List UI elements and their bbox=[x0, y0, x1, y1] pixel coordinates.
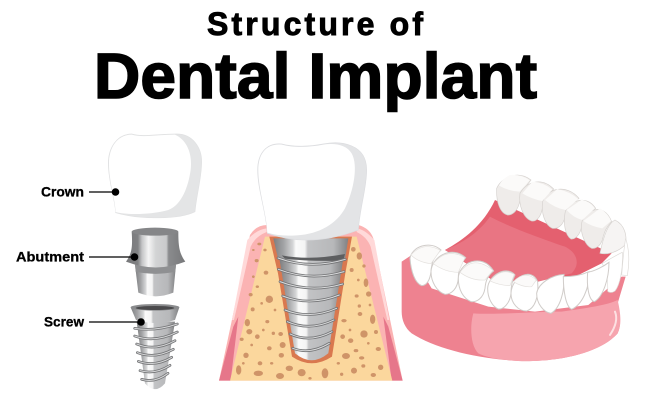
front row teeth bbox=[410, 245, 609, 313]
gum base bbox=[402, 255, 626, 361]
bone socket bbox=[269, 237, 352, 363]
gum bbox=[219, 225, 403, 381]
far side front teeth bbox=[602, 238, 629, 292]
label: Crown: Crown bbox=[41, 184, 84, 200]
label: Abutment bbox=[16, 248, 138, 264]
gum edge shine bbox=[610, 312, 616, 335]
panel: exploded implant parts bbox=[16, 134, 202, 389]
title line: Dental Implant: Dental Implant bbox=[94, 40, 537, 112]
front row occlusal tops bbox=[411, 247, 536, 287]
back row occlusal tops bbox=[499, 175, 611, 228]
bone spots bbox=[236, 243, 383, 380]
implant screw bbox=[273, 238, 348, 360]
bone bbox=[230, 237, 392, 381]
part: crown bbox=[108, 134, 202, 218]
title line: Structure of: Structure of bbox=[207, 6, 423, 42]
part: abutment bbox=[126, 228, 185, 296]
part: screw bbox=[131, 304, 179, 389]
label: Crown bbox=[41, 184, 119, 200]
jaw interior bbox=[445, 200, 612, 282]
panel: lower jaw with teeth bbox=[402, 175, 629, 361]
label: Screw: Screw bbox=[44, 314, 84, 330]
back row teeth bbox=[497, 175, 626, 254]
label: Abutment: Abutment bbox=[16, 248, 84, 264]
panel: implant in bone cross-section bbox=[219, 143, 403, 381]
implant crown bbox=[258, 143, 367, 240]
title bbox=[94, 6, 537, 112]
label: Screw bbox=[44, 314, 145, 330]
gum highlight bbox=[471, 300, 620, 361]
tongue floor bbox=[445, 217, 577, 282]
